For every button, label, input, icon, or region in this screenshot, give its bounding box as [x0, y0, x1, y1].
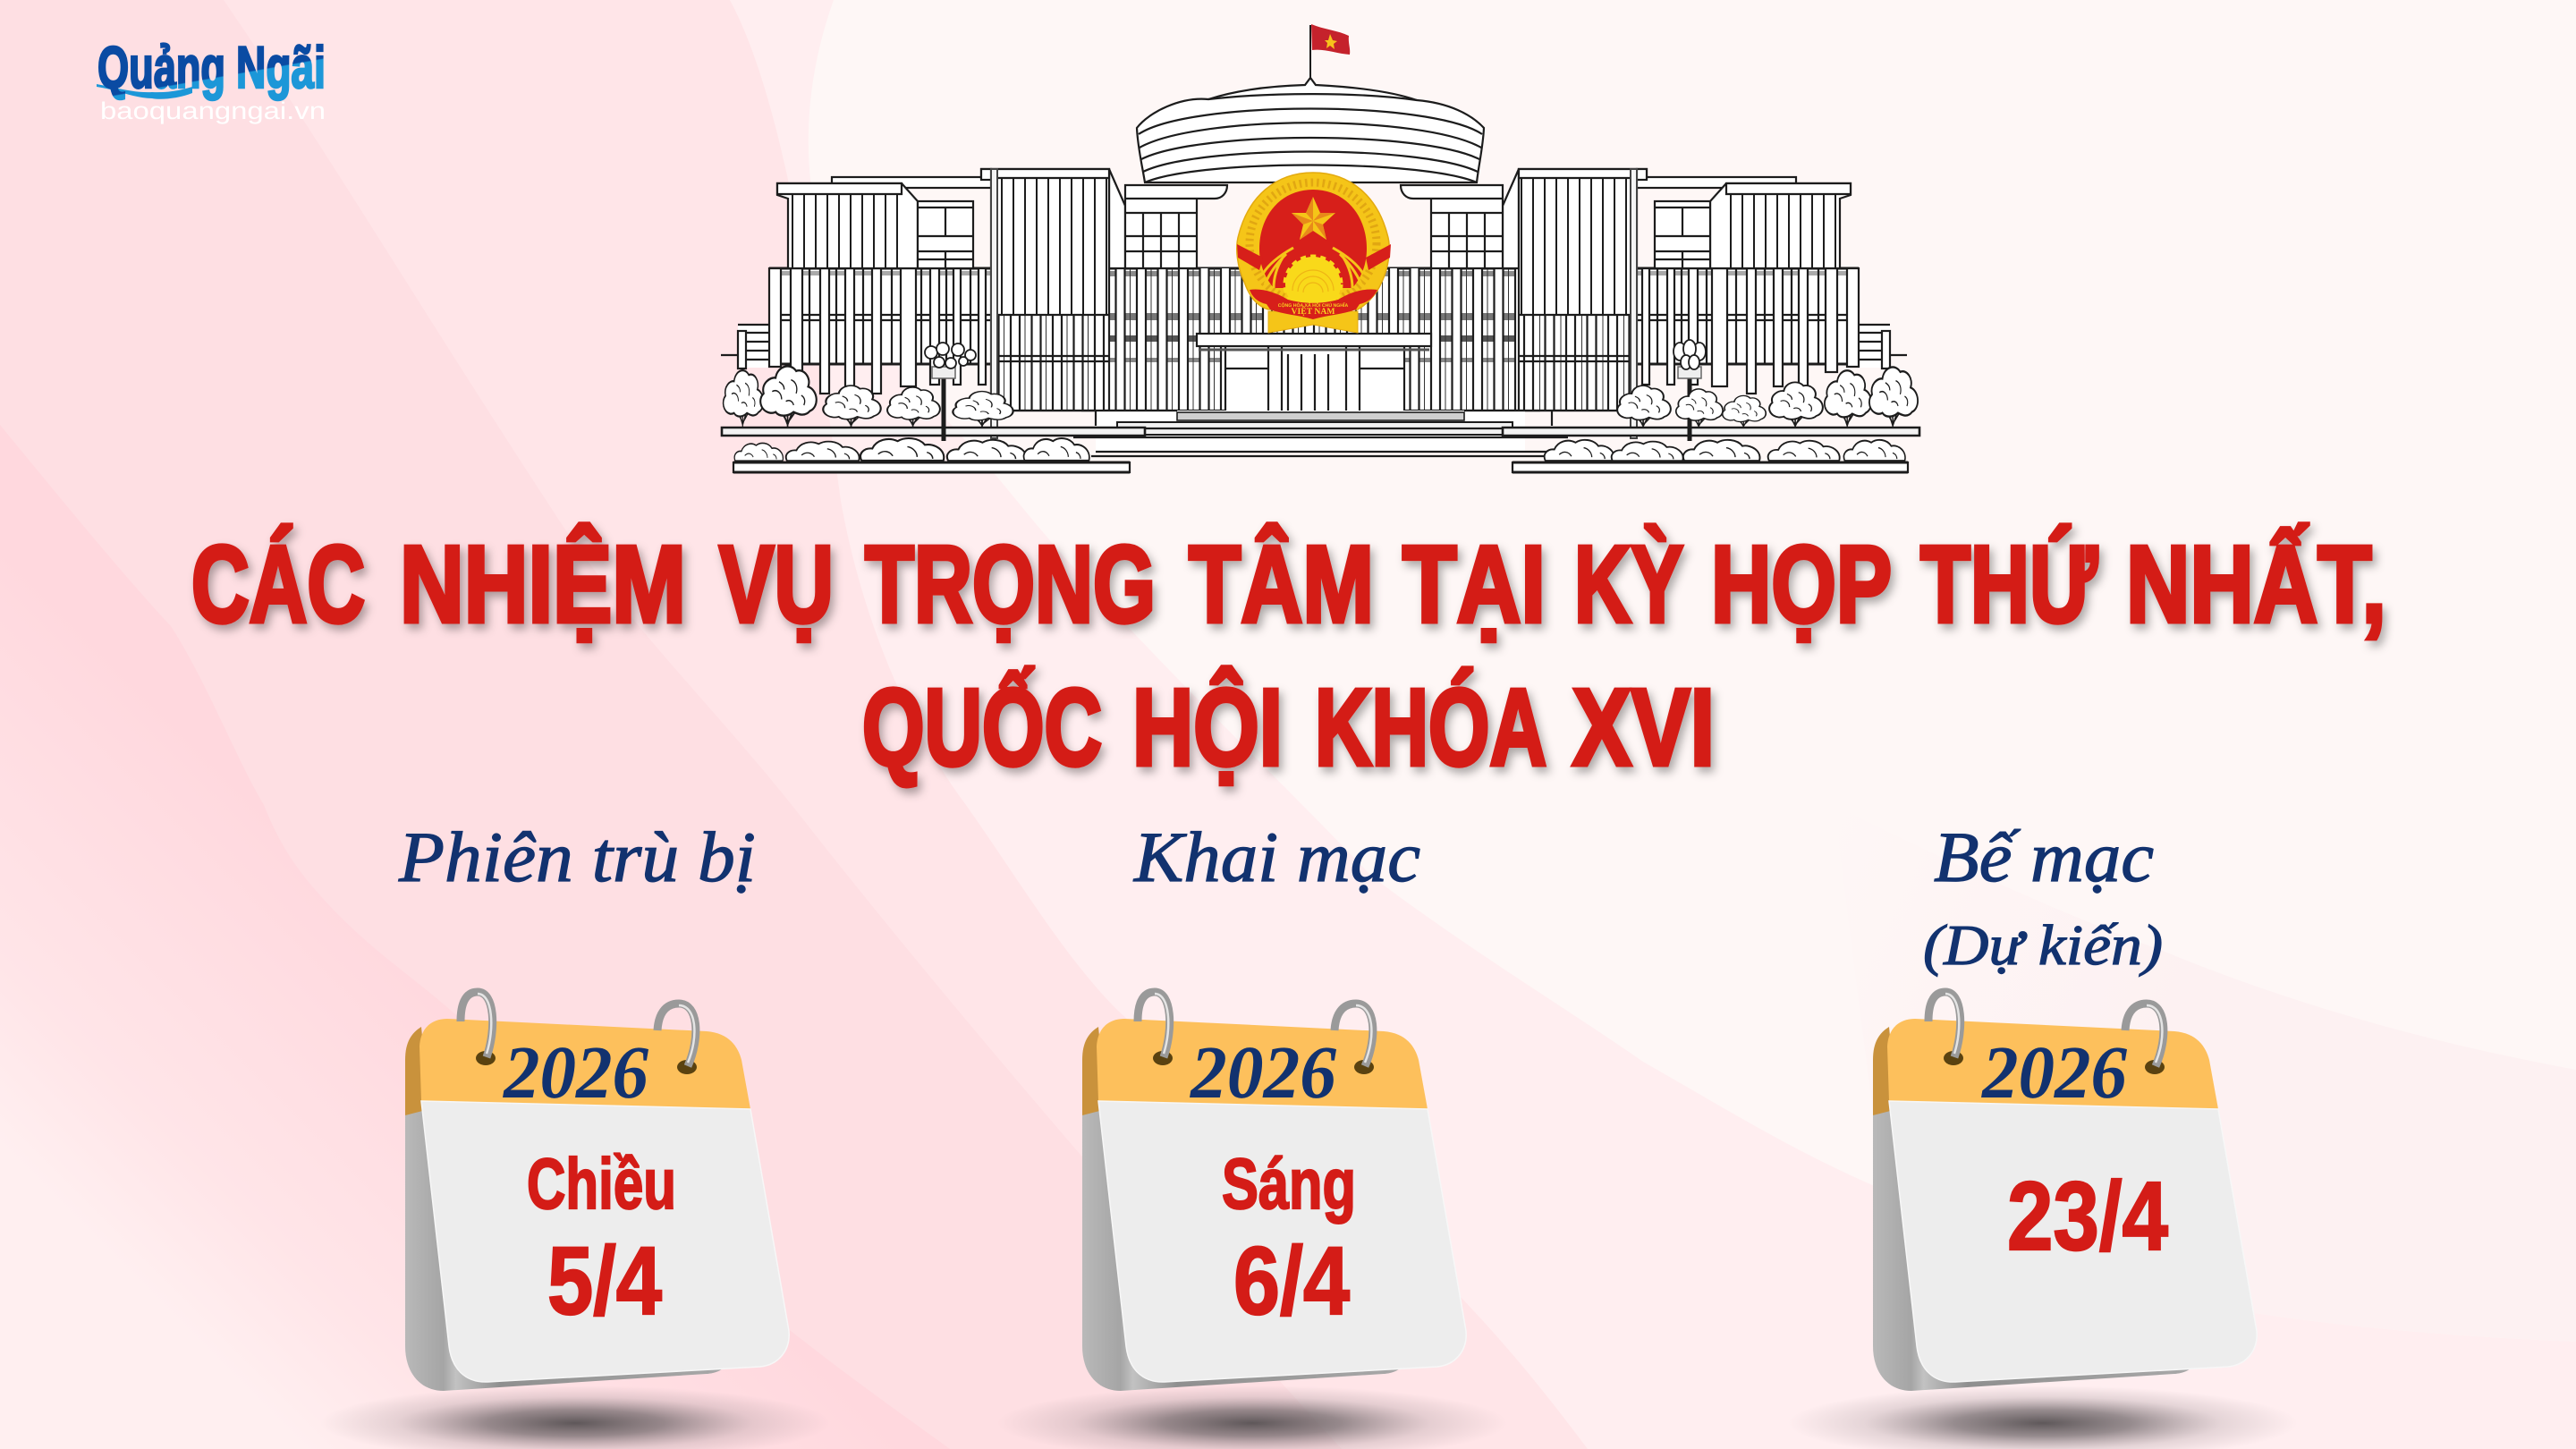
- title line 1: TRỌNG: [865, 523, 1156, 645]
- floor shadow: [1788, 1385, 2298, 1449]
- logo wordmark second word: Ngãi: [236, 34, 326, 100]
- heading: opening: Khai mạc: [1133, 818, 1420, 897]
- emblem rice stalks: [1263, 248, 1363, 288]
- logo: Quảng Ngãi: [97, 34, 326, 124]
- gold header: [1887, 1019, 2218, 1109]
- back pages: [405, 1109, 723, 1391]
- street lamps: [925, 340, 1706, 441]
- year: 2026: [1980, 1031, 2127, 1114]
- right side of the building: [1401, 169, 1907, 438]
- date: 5/4: [547, 1226, 662, 1335]
- trees: [724, 366, 1918, 428]
- heading: preparatory session: Phiên trù bị: [398, 818, 756, 897]
- illustration: National Assembly building: [721, 24, 1919, 475]
- session: Chiều: [527, 1144, 676, 1224]
- title line 1: HỌP: [1711, 523, 1892, 645]
- title line 2: KHÓA: [1315, 666, 1546, 788]
- session: Sáng: [1222, 1144, 1356, 1224]
- white sheet: [1098, 1101, 1466, 1382]
- title line 1: NHIỆM: [400, 523, 686, 645]
- calendar 1: [320, 992, 830, 1449]
- logo wordmark: Quảng: [97, 34, 225, 100]
- title line 1: VỤ: [719, 523, 834, 645]
- flag: [1310, 24, 1350, 80]
- rings: [1138, 992, 1374, 1074]
- title line 2: [862, 666, 1715, 788]
- title line 2: HỘI: [1132, 666, 1283, 788]
- year: 2026: [502, 1031, 648, 1114]
- emblem side ribbons: [1237, 244, 1391, 270]
- title line 2: XVI: [1572, 666, 1715, 788]
- date: 6/4: [1233, 1226, 1350, 1335]
- title line 1: THỨ: [1920, 523, 2098, 645]
- title line 1: NHẤT,: [2126, 523, 2386, 645]
- steps and forecourt: [722, 411, 1919, 456]
- year: 2026: [1189, 1031, 1336, 1114]
- emblem lower ribbon: [1250, 289, 1377, 319]
- logo domain: baoquangngai.vn: [100, 97, 326, 124]
- left side of the building: [721, 169, 1227, 438]
- calendar 2: [997, 992, 1507, 1449]
- title line 1: TÂM: [1189, 523, 1374, 645]
- emblem red disc: [1259, 190, 1367, 288]
- back pages: [1082, 1109, 1400, 1391]
- emblem gear: [1285, 257, 1341, 312]
- floor shadow: [997, 1385, 1507, 1449]
- title line 1: TẠI: [1402, 523, 1546, 645]
- floor shadow: [320, 1385, 830, 1449]
- back pages: [1873, 1109, 2190, 1391]
- central wing: [1081, 268, 1540, 411]
- date: 23/4: [2007, 1162, 2168, 1271]
- rings: [461, 992, 697, 1074]
- emblem star: [1292, 197, 1335, 240]
- emblem base: [1268, 311, 1358, 333]
- gold header: [1097, 1019, 1428, 1109]
- calendar 3: [1788, 992, 2298, 1449]
- heading: expected note: (Dự kiến): [1923, 913, 2163, 977]
- heading: closing: Bế mạc: [1934, 818, 2154, 897]
- planters with bushes: [733, 438, 1908, 475]
- title line 1: CÁC: [191, 523, 365, 645]
- emblem motto: CỘNG HÒA XÃ HỘI CHỦ NGHĨA: [1278, 302, 1348, 309]
- title: [191, 523, 2386, 788]
- rings: [1928, 992, 2165, 1074]
- logo wave: [97, 84, 192, 99]
- emblem gold wreath: [1237, 173, 1389, 309]
- emblem name: VIỆT NAM: [1292, 306, 1335, 317]
- icon: national emblem: [1237, 173, 1391, 333]
- white sheet: [1889, 1101, 2257, 1382]
- title line 1: [191, 523, 2386, 645]
- title line 1: KỲ: [1574, 523, 1683, 645]
- dome: [1137, 78, 1484, 182]
- gold header: [419, 1019, 750, 1109]
- title line 2: QUỐC: [862, 666, 1102, 788]
- entrance canopy and door: [1197, 334, 1431, 412]
- white sheet: [421, 1101, 789, 1382]
